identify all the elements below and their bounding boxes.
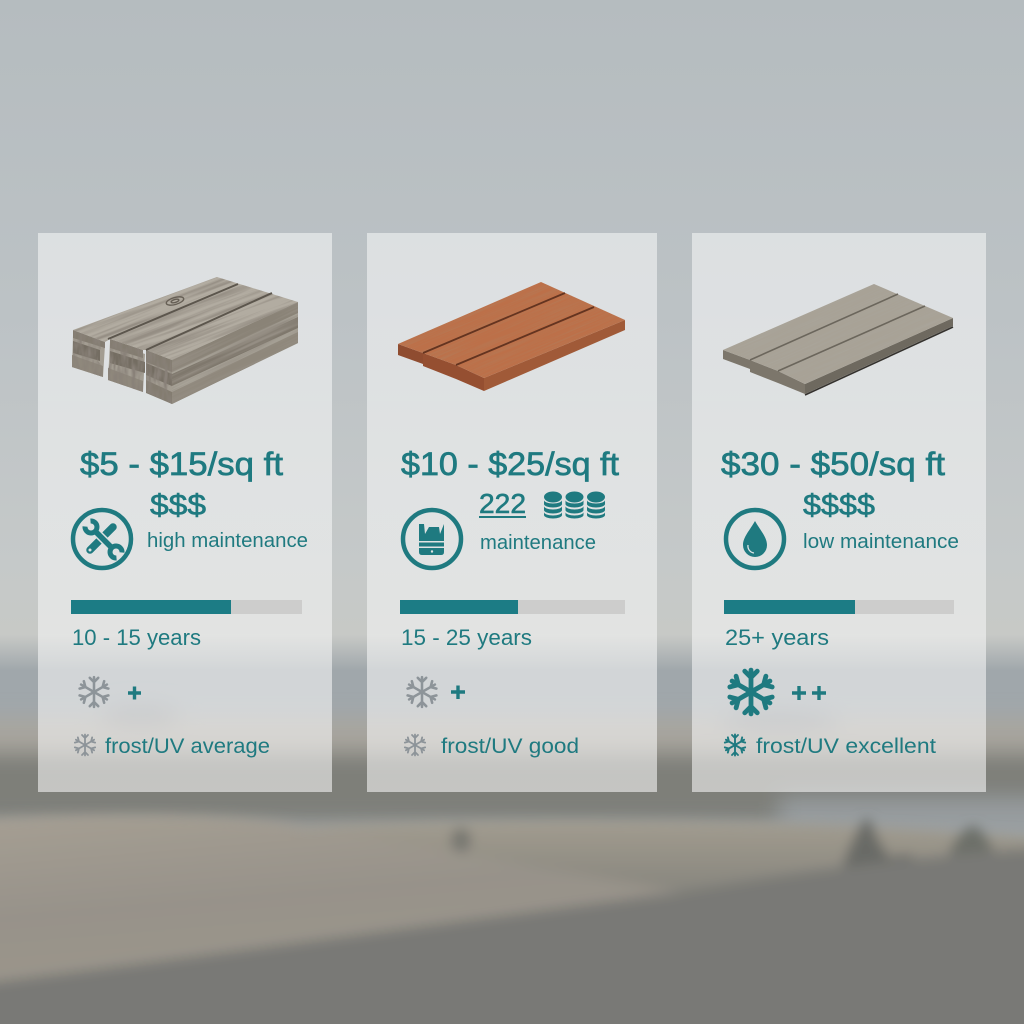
icon: water drop — [726, 510, 784, 568]
icon: teal snowflake with plus signs — [729, 670, 826, 714]
icon: wrench and screwdriver — [73, 510, 131, 568]
cost rating with coin stacks — [479, 488, 605, 519]
panel: card 2 hardwood — [367, 233, 657, 792]
lifespan text: 10 - 15 years — [72, 625, 201, 650]
maintenance label: maintenance — [480, 532, 596, 554]
price range: $30 - $50/sq ft — [721, 446, 945, 482]
icon: grey snowflake with plus — [407, 677, 465, 707]
frost rating: frost/UV excellent — [756, 735, 936, 758]
panel: card 1 pressure-treated wood — [38, 233, 332, 792]
lifespan text: 25+ years — [725, 625, 829, 650]
price range: $10 - $25/sq ft — [401, 446, 619, 482]
lifespan bar — [724, 600, 954, 614]
panel: card 3 composite — [692, 233, 986, 792]
frost rating: frost/UV average — [105, 735, 270, 758]
lifespan text: 15 - 25 years — [401, 625, 532, 650]
icon: grey snowflake with plus — [79, 677, 141, 707]
image: stacked weathered wood planks — [72, 277, 298, 404]
lifespan bar — [400, 600, 625, 614]
maintenance label: low maintenance — [803, 531, 959, 553]
icon: sealant container — [403, 510, 461, 568]
image: reddish hardwood boards — [398, 282, 625, 391]
frost rating: frost/UV good — [441, 735, 579, 758]
cost rating: $$$$ — [803, 489, 875, 522]
price range: $5 - $15/sq ft — [80, 446, 283, 482]
cost rating: $$$ — [150, 489, 206, 522]
maintenance label: high maintenance — [147, 530, 308, 552]
cost rating with coin stacks: 222 — [479, 488, 526, 519]
image: grey composite boards — [723, 284, 954, 396]
lifespan bar — [71, 600, 302, 614]
